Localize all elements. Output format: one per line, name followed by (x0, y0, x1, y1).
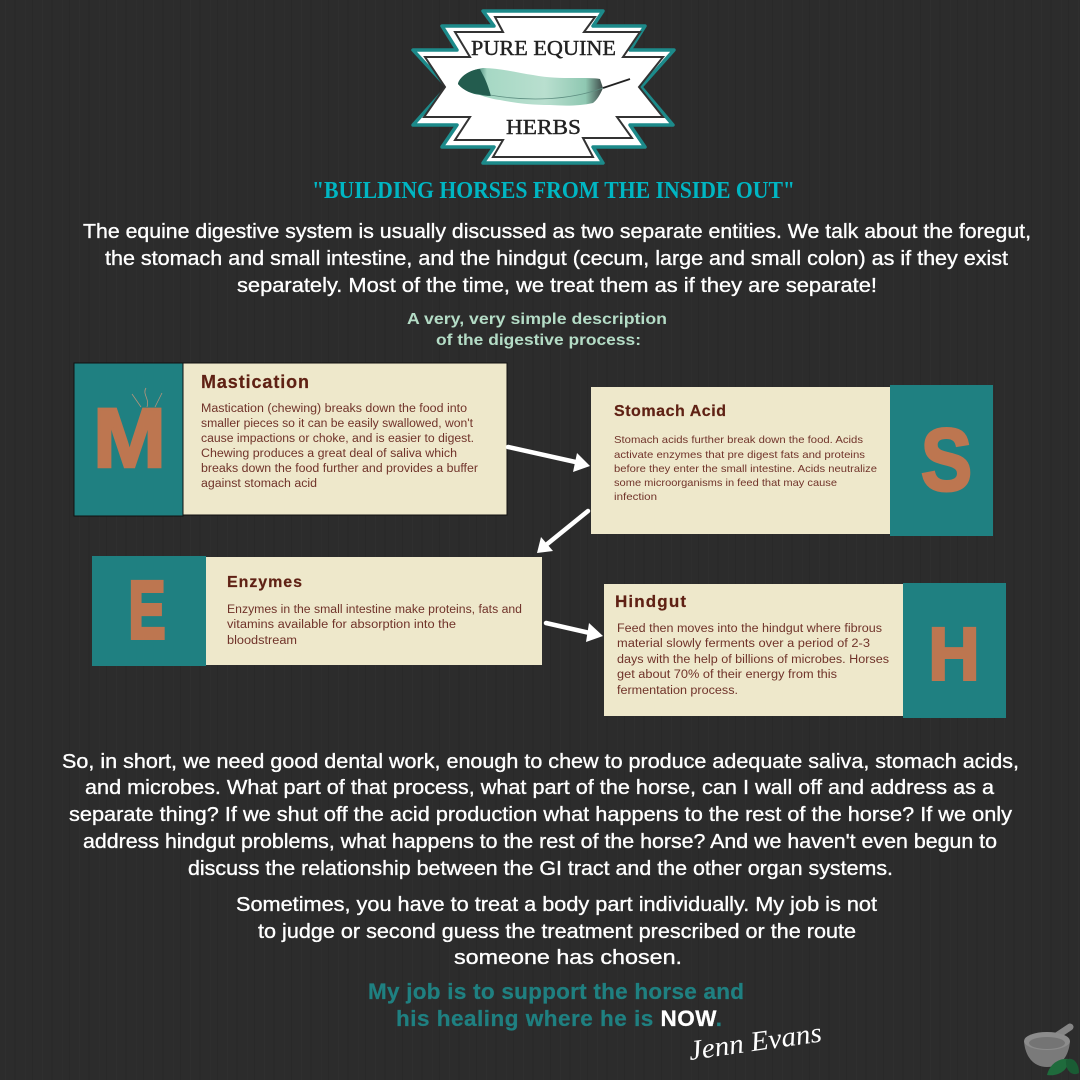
callout: support the horse (368, 979, 744, 1031)
body: Hindgut: get about 70% of their energy from this (617, 669, 837, 681)
body: Stomach Acid: some microorganisms in feed that may cause (614, 477, 837, 489)
heading: Mastication: Mastication (201, 372, 309, 392)
icon: steam lines (132, 388, 162, 407)
panel: Stomach Acid (591, 385, 993, 536)
subheading: A very, very simple description (407, 311, 667, 328)
heading: Hindgut: Hindgut (615, 592, 686, 611)
body: Mastication: against stomach acid (201, 478, 317, 490)
intro paragraph: separately. Most of the time, we treat them as if they are separate! (237, 274, 877, 297)
tagline heading: "BUILDING HORSES FROM THE INSIDE OUT" (312, 177, 795, 204)
arrow: enzymes to hindgut (546, 623, 603, 642)
body: Hindgut: fermentation process. (617, 685, 738, 697)
body: Mastication: smaller pieces so it can be easily swallowed, won't (201, 418, 474, 430)
body: Stomach Acid: infection (614, 491, 657, 503)
subheading: of the digestive process: (436, 332, 641, 349)
body: Stomach Acid: activate enzymes that pre digest fats and proteins (614, 449, 865, 461)
body: Mastication: Mastication (chewing) breaks down the food into (201, 403, 467, 415)
arrow: stomach acid to enzymes (537, 511, 588, 553)
body: Enzymes: vitamins available for absorption into the (227, 619, 456, 631)
logo wordmark top: PURE EQUINE (471, 36, 616, 60)
closing paragraph (236, 893, 877, 969)
arrow: mastication to stomach acid (508, 447, 590, 472)
panel: Enzymes (92, 556, 542, 666)
intro paragraph (83, 220, 1031, 297)
closing paragraph: Sometimes, you have to treat a body part individually. My job is not (236, 893, 877, 916)
summary paragraph: discuss the relationship between the GI tract and the other organ systems. (188, 857, 893, 880)
body: Enzymes: Enzymes in the small intestine make proteins, fats and (227, 604, 522, 616)
letter S: S (921, 410, 972, 509)
letter H: H (928, 612, 980, 696)
body: Hindgut: days with the help of billions of microbes. Horses (617, 654, 889, 666)
logo feather (458, 68, 630, 106)
logo wordmark bottom: HERBS (506, 115, 581, 139)
summary paragraph (62, 750, 1019, 880)
subheading (407, 311, 667, 349)
body: Mastication (201, 403, 478, 490)
body: Enzymes: bloodstream (227, 635, 297, 647)
body: Hindgut: material slowly ferments over a period of 2-3 (617, 638, 870, 650)
callout: support the horse: his healing where he is NOW. (396, 1006, 722, 1031)
closing paragraph: to judge or second guess the treatment prescribed or the route (258, 920, 856, 943)
heading: Stomach Acid: Stomach Acid (614, 403, 726, 420)
signature: Jenn Evans (687, 1018, 824, 1067)
logo: Pure Equine Herbs (413, 11, 674, 163)
intro paragraph: the stomach and small intestine, and the hindgut (cecum, large and small colon) as if they exist (105, 247, 1008, 270)
closing paragraph: someone has chosen. (454, 946, 682, 969)
summary paragraph: So, in short, we need good dental work, enough to chew to produce adequate saliva, stomach acids, (62, 750, 1019, 773)
summary paragraph: address hindgut problems, what happens to the rest of the horse? And we haven't even begun to (83, 830, 997, 853)
summary paragraph: and microbes. What part of that process, what part of the horse, can I wall off and address as a (85, 776, 995, 799)
letter E: E (128, 565, 166, 656)
body: Enzymes (227, 604, 522, 647)
callout: support the horse: My job is to support the horse and (368, 979, 744, 1004)
icon: mortar and pestle (1024, 1027, 1079, 1075)
body: Stomach Acid: Stomach acids further break down the food. Acids (614, 434, 863, 446)
panel: Mastication (74, 363, 507, 516)
summary paragraph: separate thing? If we shut off the acid production what happens to the rest of the horse? If we only (69, 803, 1013, 826)
letter M: M (93, 391, 166, 485)
body: Hindgut (617, 623, 889, 697)
body: Stomach Acid: before they enter the small intestine. Acids neutralize (614, 463, 877, 475)
intro paragraph: The equine digestive system is usually discussed as two separate entities. We talk about the foregut, (83, 220, 1031, 243)
heading: Enzymes: Enzymes (227, 574, 302, 591)
panel: Hindgut (604, 583, 1006, 718)
body: Hindgut: Feed then moves into the hindgut where fibrous (617, 623, 882, 635)
body: Stomach Acid (614, 434, 877, 503)
body: Mastication: Chewing produces a great deal of saliva which (201, 448, 457, 460)
body: Mastication: breaks down the food further and provides a buffer (201, 463, 478, 475)
body: Mastication: cause impactions or choke, and is easier to digest. (201, 433, 474, 445)
